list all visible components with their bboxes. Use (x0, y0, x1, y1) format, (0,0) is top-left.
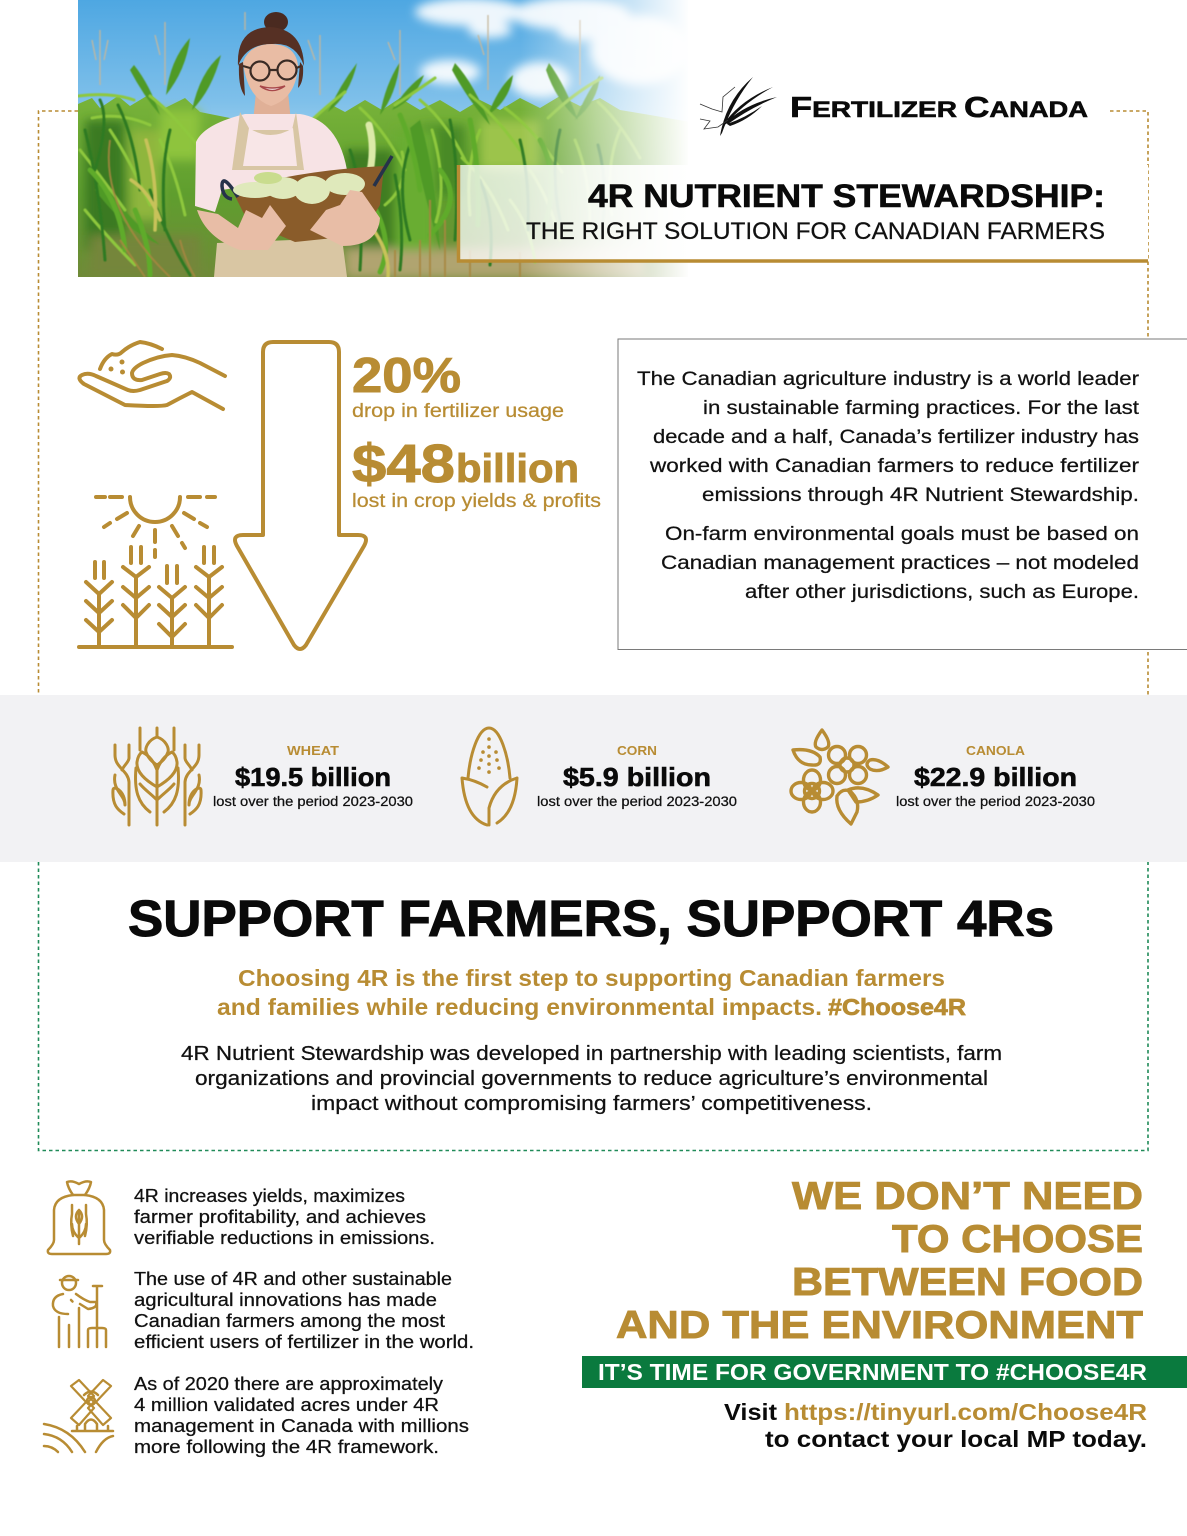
corn leaves (78, 12, 640, 277)
visit link text: Visit (724, 1399, 777, 1425)
corn group (462, 728, 737, 825)
intro paragraph 2: after other jurisdictions, such as Europe. (745, 581, 1139, 603)
visit link text: https://tinyurl.com/Choose4R (784, 1399, 1147, 1425)
face and hair (238, 27, 304, 66)
icon: canola (791, 730, 888, 824)
call to action headline: TO CHOOSE (892, 1218, 1143, 1261)
left arm and hand (197, 205, 286, 250)
icon: windmill (44, 1380, 113, 1452)
basket (232, 166, 384, 242)
sky (78, 0, 682, 120)
stats section (79, 342, 601, 649)
visit link text (724, 1399, 1147, 1452)
box outline (618, 339, 1187, 650)
logo leaf mark (700, 77, 777, 136)
stat label: lost in crop yields & profits (352, 491, 601, 512)
field dark and straw tones (85, 110, 645, 278)
intro paragraph 1: The Canadian agriculture industry is a world leader (637, 368, 1140, 390)
intro paragraph 1: emissions through 4R Nutrient Stewardship. (702, 484, 1139, 506)
corn cobs (233, 172, 365, 204)
stat unit: billion (456, 447, 579, 491)
benefit 2 text (134, 1269, 474, 1352)
support paragraph: impact without compromising farmers’ competitiveness. (311, 1093, 872, 1115)
call to action headline: BETWEEN FOOD (792, 1261, 1143, 1304)
canola group (791, 730, 1095, 824)
benefit 1 (48, 1181, 435, 1254)
intro paragraph 1: in sustainable farming practices. For the last (703, 397, 1140, 419)
corn amount: $5.9 billion (563, 762, 711, 792)
intro paragraph 1 (637, 368, 1140, 506)
canola amount: $22.9 billion (914, 762, 1077, 792)
stat label: drop in fertilizer usage (352, 401, 564, 422)
title panel (457, 165, 1148, 262)
corn label: CORN (617, 743, 657, 758)
icon: corn (462, 728, 517, 825)
farmer woman (195, 12, 392, 277)
intro paragraph 1: worked with Canadian farmers to reduce fertilizer (649, 455, 1140, 477)
call to action headline (616, 1175, 1143, 1347)
hero photo: farmer in corn field (78, 0, 690, 278)
benefit 1 text: farmer profitability, and achieves (134, 1207, 426, 1227)
gold subheading: #Choose4R (828, 994, 966, 1020)
canola note: lost over the period 2023-2030 (896, 794, 1095, 809)
smile (260, 86, 285, 90)
benefit 1 text: 4R increases yields, maximizes (134, 1186, 405, 1206)
logo wordmark: FERTILIZER (790, 92, 957, 124)
call to action headline: AND THE ENVIRONMENT (616, 1304, 1143, 1347)
benefit 2 (53, 1269, 474, 1352)
crop losses band (0, 695, 1187, 862)
panel background (457, 165, 1148, 262)
icon: farmer with pitchfork (53, 1276, 106, 1347)
logo wordmark second word: CANADA (964, 92, 1088, 124)
icon: sun and crops (79, 497, 232, 647)
right hand (310, 190, 380, 246)
apron bib (232, 112, 304, 170)
wheat amount: $19.5 billion (235, 762, 391, 792)
gold dashed frame (38, 111, 1148, 695)
corn note: lost over the period 2023-2030 (537, 794, 737, 809)
visit link text: to contact your local MP today. (765, 1426, 1147, 1452)
apron lower (214, 238, 347, 277)
subtitle: THE RIGHT SOLUTION FOR CANADIAN FARMERS (526, 218, 1105, 245)
stat: 20%: 20% (352, 349, 461, 403)
icon: fertilizer bag (48, 1181, 110, 1254)
shirt (195, 114, 347, 212)
intro paragraph 2: On-farm environmental goals must be based on (665, 523, 1139, 545)
panel gold border (458, 165, 1148, 261)
benefit 2 text: The use of 4R and other sustainable (134, 1269, 452, 1289)
benefit 3 text: As of 2020 there are approximately (134, 1374, 443, 1394)
icon: wheat (113, 728, 201, 825)
benefit 3 text: 4 million validated acres under 4R (134, 1395, 439, 1415)
canola label: CANOLA (966, 743, 1026, 758)
support paragraph: organizations and provincial governments to reduce agriculture’s environmental (195, 1068, 988, 1090)
gold subheading (217, 965, 966, 1020)
green dashed frame (38, 862, 1148, 1150)
support paragraph (181, 1043, 1002, 1115)
benefit 3 text (134, 1374, 469, 1457)
benefit 1 text (134, 1186, 435, 1248)
basket handles (222, 156, 392, 199)
benefit 2 text: Canadian farmers among the most (134, 1311, 445, 1331)
benefit 1 text: verifiable reductions in emissions. (134, 1228, 435, 1248)
neck (254, 94, 290, 114)
band background (0, 695, 1187, 862)
benefit 2 text: agricultural innovations has made (134, 1290, 437, 1310)
benefit 3 text: management in Canada with millions (134, 1416, 469, 1436)
intro paragraph 2 (661, 523, 1139, 603)
wheat group (113, 728, 413, 825)
down arrow (235, 342, 366, 649)
benefit 2 text: efficient users of fertilizer in the world. (134, 1332, 474, 1352)
gold subheading: and families while reducing environmental impacts. (217, 994, 822, 1020)
call to action headline: WE DON’T NEED (792, 1175, 1143, 1218)
corn field mass (78, 94, 690, 277)
intro paragraph 2: Canadian management practices – not modeled (661, 552, 1139, 574)
thin bright leaves (78, 78, 640, 265)
support heading: SUPPORT FARMERS, SUPPORT 4Rs (128, 890, 1054, 947)
logo: Fertilizer Canada (700, 77, 1088, 136)
glasses (243, 60, 301, 80)
benefit 3 text: more following the 4R framework. (134, 1437, 439, 1457)
stat: $48 billion: $48 (352, 434, 455, 494)
green call to action bar: IT’S TIME FOR GOVERNMENT TO #CHOOSE4R (598, 1359, 1147, 1385)
icon: hand with fertilizer (79, 342, 225, 409)
white fade to page (520, 0, 690, 277)
title: 4R NUTRIENT STEWARDSHIP: (588, 178, 1105, 214)
intro paragraph 1: decade and a half, Canada’s fertilizer industry has (653, 426, 1139, 448)
intro text box (618, 339, 1187, 650)
green call to action bar (582, 1356, 1187, 1388)
hair bun (264, 12, 288, 32)
support paragraph: 4R Nutrient Stewardship was developed in partnership with leading scientists, farm (181, 1043, 1002, 1065)
wheat note: lost over the period 2023-2030 (213, 794, 413, 809)
wheat label: WHEAT (287, 743, 339, 758)
gold subheading: Choosing 4R is the first step to supporting Canadian farmers (238, 965, 945, 991)
benefit 3 (44, 1374, 469, 1457)
clouds (415, 0, 690, 98)
